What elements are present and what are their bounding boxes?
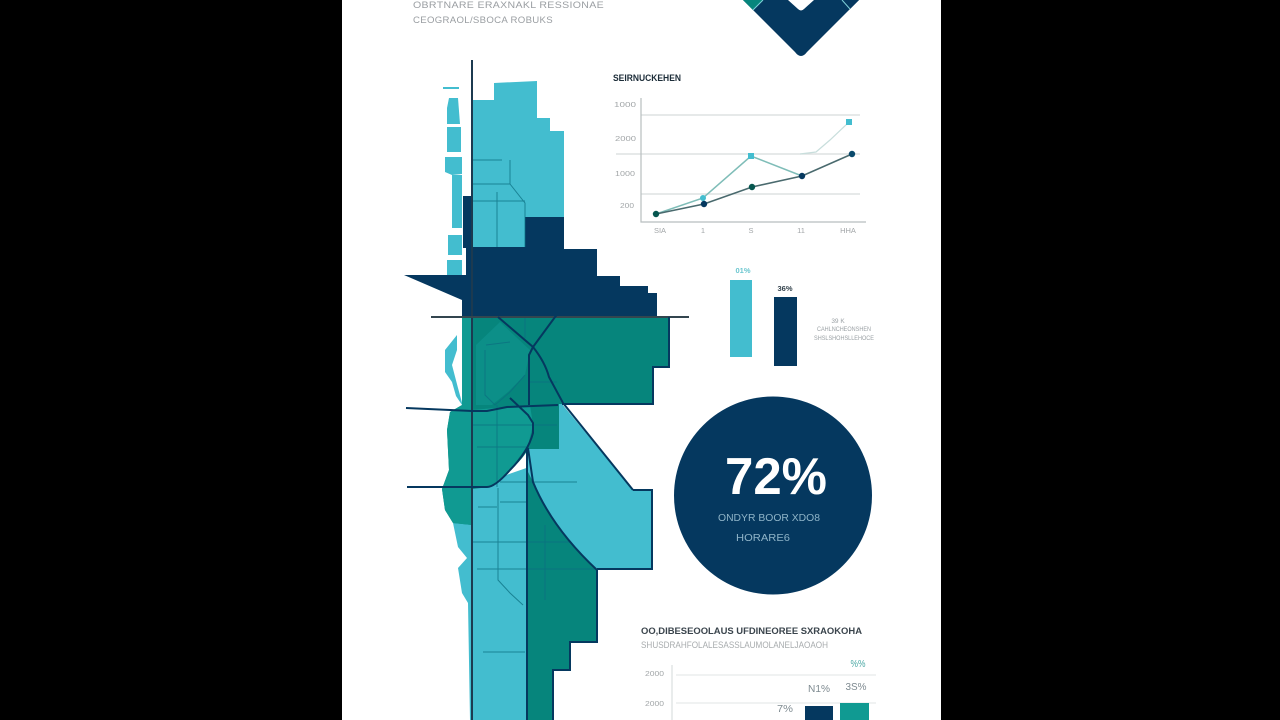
light bar label: 01%: [735, 266, 751, 275]
line chart y axis labels: 1000: [614, 100, 636, 109]
stat caption: HORARE6: [736, 533, 790, 544]
stat caption: ONDYR BOOR XDO8: [718, 513, 820, 524]
teal bar: [840, 703, 869, 720]
map region: northern light blue: [472, 81, 564, 247]
header text: [413, 0, 604, 26]
stat circle: [674, 396, 872, 594]
line chart x axis labels: 1: [701, 226, 705, 235]
map roads: [406, 60, 689, 720]
bottom chart y labels: [645, 669, 664, 708]
map region: western lighter teal: [442, 317, 472, 525]
comparison bars: [730, 266, 875, 366]
bars caption: SHSLSHOHSLLEHOCE: [814, 335, 875, 342]
stat value: 72%: [725, 448, 827, 506]
bottom bar labels: 3S%: [846, 682, 867, 693]
line chart x axis labels: HHA: [840, 226, 856, 235]
line chart y axis labels: [614, 100, 636, 210]
line chart grid and axes: [616, 98, 866, 222]
teal series: [656, 119, 852, 214]
bars caption: [814, 318, 875, 342]
navy series: [653, 151, 855, 217]
bottom bar labels: N1%: [808, 684, 830, 695]
line chart y axis labels: 1000: [615, 169, 635, 178]
line chart y axis labels: 200: [620, 201, 634, 210]
map region: central teal: [442, 317, 669, 525]
navy bar: [805, 706, 833, 720]
header text: CEOGRAOL/SBOCA ROBUKS: [413, 15, 553, 26]
map region: central navy: [404, 196, 657, 317]
line chart x axis labels: S: [748, 226, 754, 235]
map region: southeast light blue: [527, 404, 652, 569]
navy bar: [774, 297, 797, 366]
bottom bar labels: 7%: [777, 704, 793, 715]
bottom chart y labels: 2000: [645, 699, 664, 708]
map minor streets: [472, 160, 597, 652]
bars caption: CAHLNCHEONSHEN: [817, 326, 871, 333]
bottom bar chart: [641, 626, 876, 720]
line chart x axis labels: SIA: [654, 226, 666, 235]
line chart x axis labels: [654, 226, 856, 235]
segmented map: [404, 60, 689, 720]
bottom chart subheading: SHUSDRAHFOLALESASSLAUMOLANELJAOAOH: [641, 640, 828, 650]
light bar: [730, 280, 752, 357]
bottom chart grid and axis: [676, 675, 876, 703]
map region: west coast strips: [443, 87, 464, 410]
line chart heading: SEIRNUCKEHEN: [613, 73, 681, 84]
bottom chart y labels: 2000: [645, 669, 664, 678]
bottom chart heading: OO,DIBESEOOLAUS UFDINEOREE SXRAOKOHA: [641, 626, 862, 637]
stat caption: [718, 513, 820, 544]
map region: southern light blue corridor: [453, 465, 535, 720]
line chart y axis labels: 2000: [615, 134, 636, 143]
bottom bar labels: [777, 659, 867, 715]
line chart x axis labels: 11: [797, 226, 805, 235]
navy bar label: 36%: [777, 284, 793, 293]
map region: southern teal: [527, 470, 597, 720]
bottom bar labels: %%: [850, 659, 866, 670]
line chart: [613, 73, 866, 235]
header text: OBRTNARE ERAXNAKL RESSIONAE: [413, 0, 604, 11]
logo icon: [743, 0, 859, 56]
bars caption: 39 K: [831, 318, 845, 325]
